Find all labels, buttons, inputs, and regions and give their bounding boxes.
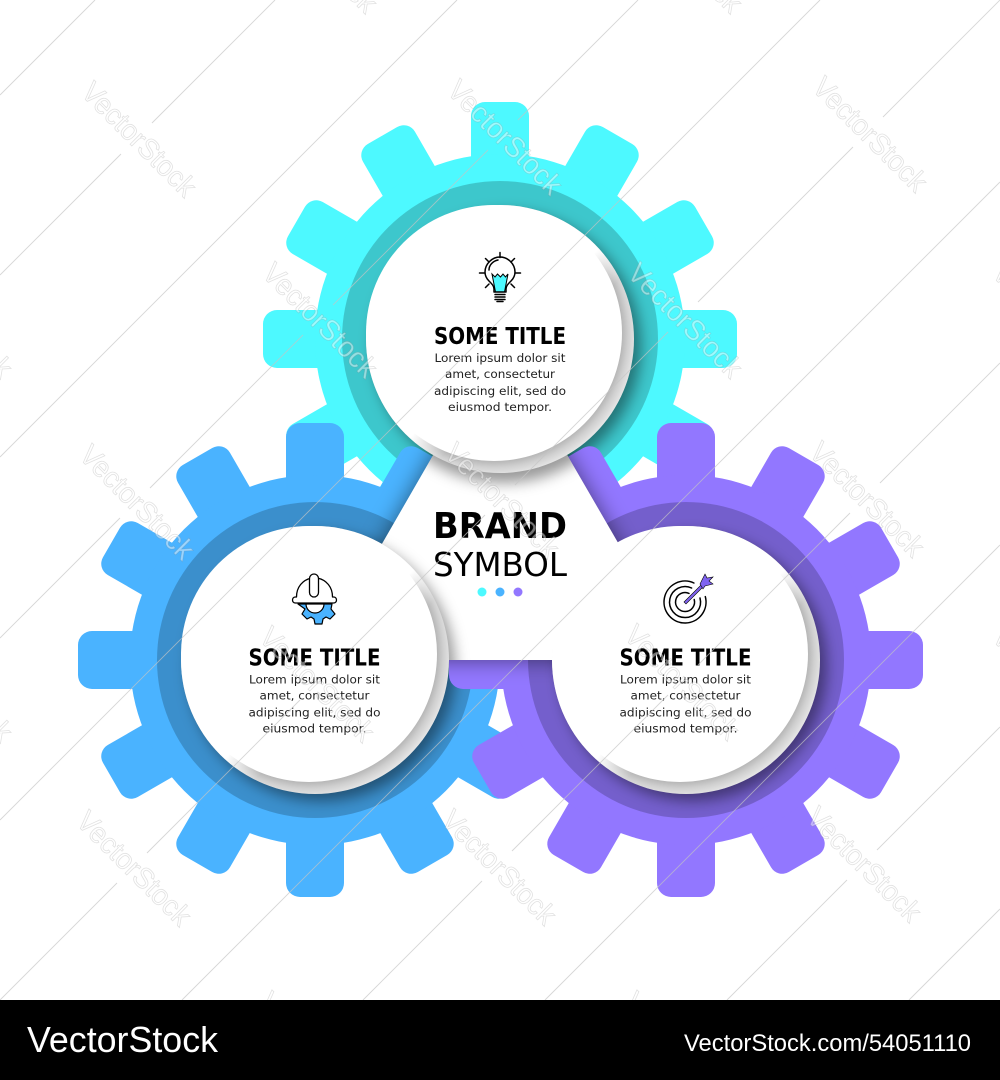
- watermark text: VectorStock: [438, 437, 565, 565]
- central triangle panel: [370, 448, 630, 676]
- watermark text: VectorStock: [618, 619, 745, 747]
- text block: top gear: Lorem ipsum dolor sit: [434, 351, 566, 365]
- text block: top gear: amet, consectetur: [445, 367, 555, 381]
- text block: top gear: [434, 324, 566, 414]
- icon: hard hat with gear: [292, 574, 336, 624]
- text block: right gear: adipiscing elit, sed do: [620, 706, 752, 720]
- watermark text: VectorStock: [806, 71, 933, 199]
- heading: brand symbol: [433, 506, 568, 584]
- disc: right white circle: [552, 526, 820, 794]
- text block: left gear: amet, consectetur: [260, 688, 370, 702]
- footer bar: VectorStock.com/54051110: [684, 1030, 971, 1057]
- text block: right gear: [620, 646, 752, 736]
- icon: light bulb: [480, 252, 520, 302]
- text block: left gear: SOME TITLE: [248, 646, 380, 672]
- text block: top gear: SOME TITLE: [434, 324, 566, 350]
- heading: brand symbol: BRAND: [433, 506, 567, 547]
- text block: left gear: [248, 646, 380, 736]
- text block: left gear: eiusmod tempor.: [262, 722, 366, 736]
- watermark text: VectorStock: [435, 804, 562, 932]
- gear: top cyan: [263, 102, 737, 576]
- text block: right gear: Lorem ipsum dolor sit: [620, 672, 751, 686]
- disc: top white circle: [366, 205, 634, 473]
- watermark text: VectorStock: [75, 76, 202, 204]
- watermark text: VectorStock: [803, 436, 930, 564]
- text block: left gear: adipiscing elit, sed do: [248, 706, 380, 720]
- watermark text: VectorStock: [256, 257, 383, 385]
- text block: top gear: eiusmod tempor.: [448, 400, 552, 414]
- text block: left gear: Lorem ipsum dolor sit: [249, 672, 380, 686]
- text block: right gear: SOME TITLE: [620, 646, 752, 672]
- watermark text: VectorStock: [621, 257, 748, 385]
- watermark text: VectorStock: [73, 439, 200, 567]
- text block: right gear: eiusmod tempor.: [634, 722, 738, 736]
- watermark text: VectorStock: [253, 621, 380, 749]
- three colour dots: [478, 588, 522, 596]
- heading: brand symbol: SYMBOL: [433, 545, 568, 584]
- watermark text: VectorStock: [70, 805, 197, 933]
- footer bar: [0, 1000, 1000, 1080]
- disc: left white circle: [181, 526, 449, 794]
- gear: left blue: [78, 423, 501, 897]
- footer bar: VectorStock: [27, 1019, 219, 1060]
- text block: right gear: amet, consectetur: [630, 688, 741, 702]
- icon: target with arrow: [664, 574, 713, 623]
- watermark text: VectorStock: [800, 801, 927, 929]
- watermark text: VectorStock: [441, 74, 568, 202]
- text block: top gear: adipiscing elit, sed do: [434, 384, 566, 398]
- gear: right purple: [449, 423, 923, 897]
